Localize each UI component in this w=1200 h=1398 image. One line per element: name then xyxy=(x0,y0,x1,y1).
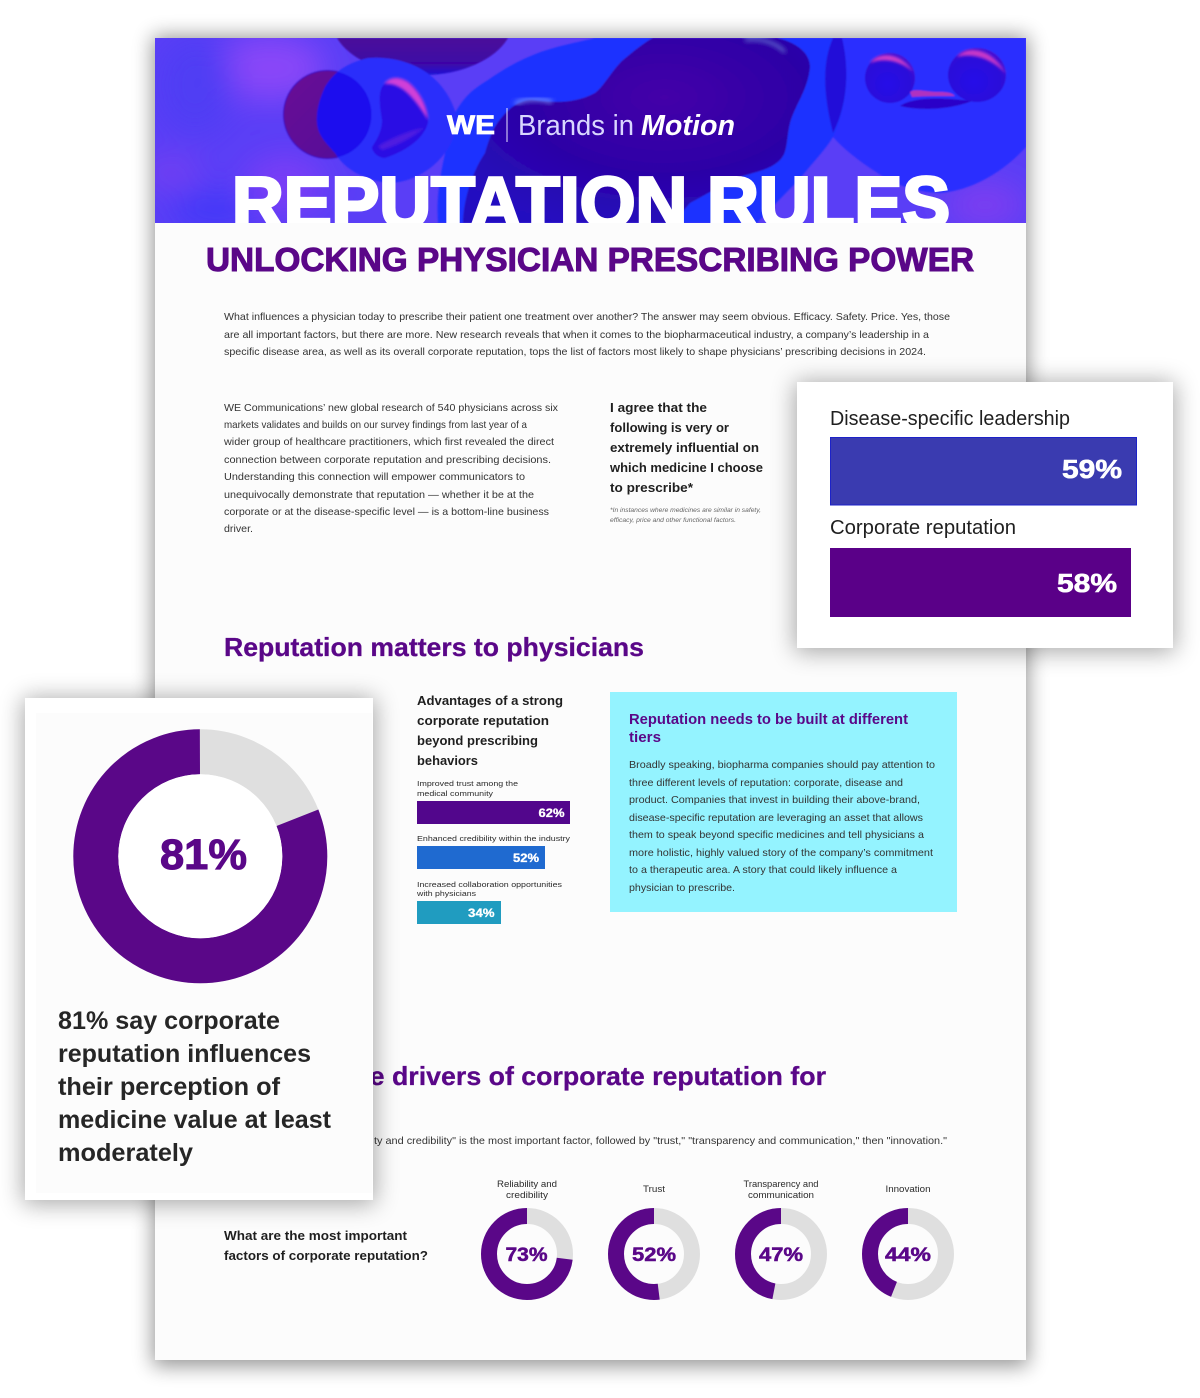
advantages heading: Advantages of a strong xyxy=(417,693,563,708)
footnote: *In instances where medicines are similar in safety, xyxy=(610,507,761,514)
bar chart: advantages: 34% xyxy=(468,906,495,920)
card statement: their perception of xyxy=(58,1073,281,1101)
donut: reliability and credibility 73%: credibility xyxy=(506,1190,548,1200)
central bright blob xyxy=(438,38,846,223)
research paragraph: connection between corporate reputation and prescribing decisions. xyxy=(224,454,551,466)
research paragraph xyxy=(223,402,559,535)
right blue blob xyxy=(832,38,1026,194)
survey question xyxy=(609,400,763,495)
logo xyxy=(447,108,735,142)
bar chart: advantages: medical community xyxy=(417,789,493,798)
donut: trust 52% xyxy=(616,1184,692,1292)
factors question: What are the most important xyxy=(224,1228,408,1243)
panel: poster page xyxy=(155,38,1026,1360)
logo: WE xyxy=(447,110,495,140)
research paragraph: WE Communications’ new global research of 540 physicians across six xyxy=(224,402,559,414)
callout: reputation tiers: product. Companies that invest in building their above-brand, xyxy=(629,794,920,806)
card statement: moderately xyxy=(58,1139,193,1167)
research paragraph: Understanding this connection will empower communicators to xyxy=(224,471,525,483)
logo: Brands in xyxy=(518,110,634,142)
shadow: poster page xyxy=(153,36,1028,1366)
research paragraph: markets validates and builds on our survey findings from last year of a xyxy=(224,419,527,431)
survey question: to prescribe* xyxy=(610,480,694,495)
donut: transparency and communication 47% xyxy=(743,1179,819,1292)
donut: transparency and communication 47%: Transparency and xyxy=(744,1179,818,1189)
card statement: medicine value at least xyxy=(58,1106,332,1134)
section heading: drivers: What are the drivers of corporate reputation for xyxy=(224,1061,826,1091)
section heading: reputation matters: Reputation matters to physicians xyxy=(224,632,644,662)
subtitle: UNLOCKING PHYSICIAN PRESCRIBING POWER xyxy=(206,241,974,278)
panel: leadership card: Disease-specific leadership xyxy=(830,408,1070,430)
card statement: 81% say corporate xyxy=(58,1007,280,1035)
card statement: reputation influences xyxy=(58,1040,311,1068)
callout: reputation tiers xyxy=(610,692,957,912)
callout: reputation tiers: more holistic, highly valued story of the company’s commitment xyxy=(629,847,933,859)
donut: reliability and credibility 73%: 73% xyxy=(506,1245,548,1266)
panel: leadership card xyxy=(797,382,1173,648)
blue bubble xyxy=(338,56,457,183)
donut: innovation 44% xyxy=(870,1184,946,1292)
factors question xyxy=(224,1228,428,1263)
bar chart: advantages: Increased collaboration opportunities xyxy=(417,880,562,889)
shadow: leadership card xyxy=(795,382,1175,652)
title: REPUTATION RULES xyxy=(232,164,950,244)
donut: transparency and communication 47%: 47% xyxy=(759,1245,803,1266)
survey question: which medicine I choose xyxy=(609,460,763,475)
dark circle xyxy=(282,69,338,160)
intro paragraph xyxy=(224,311,950,358)
callout: reputation tiers: three different levels of reputation: corporate, disease and xyxy=(629,777,903,789)
intro paragraph: What influences a physician today to prescribe their patient one treatment over another? The answer may seem obvious. Efficacy. Safety. Price. Yes, those xyxy=(224,311,950,323)
donut: trust 52%: 52% xyxy=(632,1245,676,1266)
highlights xyxy=(745,40,785,52)
callout: reputation tiers: to a therapeutic area. A story that could likely influence a xyxy=(629,864,897,876)
intro paragraph: specific disease area, as well as its overall corporate reputation, tops the list of factors most likely to shape physicians’ prescribing decisions in 2024. xyxy=(224,346,926,358)
card statement xyxy=(58,1007,332,1167)
shadow: 81% card xyxy=(23,698,375,1204)
donut: transparency and communication 47%: communication xyxy=(748,1190,814,1200)
bar chart: advantages xyxy=(416,779,570,924)
panel: leadership card: 58% xyxy=(1057,568,1117,598)
header banner xyxy=(155,38,1026,223)
drivers text: Physicians say "reliabili xyxy=(224,1135,374,1147)
research paragraph: wider group of healthcare practitioners, which first revealed the direct xyxy=(223,436,554,448)
donut: reliability and credibility 73%: Reliability and xyxy=(497,1179,557,1189)
lens shadow and connector xyxy=(900,99,972,109)
research paragraph: driver. xyxy=(224,523,253,535)
bar chart: advantages: 62% xyxy=(538,806,565,820)
survey question: I agree that the xyxy=(610,400,707,415)
donut: innovation 44%: Innovation xyxy=(886,1184,930,1194)
callout: reputation tiers: tiers xyxy=(629,730,661,746)
bar chart: advantages: with physicians xyxy=(416,889,476,898)
advantages heading: corporate reputation xyxy=(417,713,549,728)
callout: reputation tiers: Broadly speaking, biopharma companies should pay attention to xyxy=(629,759,935,771)
lens strip xyxy=(825,38,846,133)
footnote: efficacy, price and other functional factors. xyxy=(610,517,736,524)
callout: reputation tiers: disease-specific reputation are leveraging an asset that allows xyxy=(629,812,923,824)
research paragraph: unequivocally demonstrate that reputation — whether it be at the xyxy=(224,489,534,501)
core dark blob xyxy=(463,38,810,223)
research paragraph: corporate or at the disease-specific level — is a bottom-line business xyxy=(224,506,549,518)
donut: reliability and credibility 73% xyxy=(489,1179,565,1292)
bar chart: advantages: Improved trust among the xyxy=(417,779,518,788)
factors question: factors of corporate reputation? xyxy=(224,1248,428,1263)
panel: leadership card: 59% xyxy=(1062,454,1122,484)
right lens right xyxy=(948,48,1006,102)
survey question: following is very or xyxy=(610,420,729,435)
donut: 81 percent xyxy=(96,752,305,961)
right lens left xyxy=(865,53,915,103)
drivers text: ty and credibility" is the most important factor, followed by "trust," "transparency and communication," then "innovation." xyxy=(374,1135,947,1147)
donut: 81 percent: 81% xyxy=(160,831,247,879)
advantages heading: beyond prescribing xyxy=(417,733,538,748)
callout: reputation tiers: Reputation needs to be built at different xyxy=(629,712,908,728)
bar chart: advantages: 52% xyxy=(513,851,539,865)
advantages heading: behaviors xyxy=(417,753,478,768)
logo: Motion xyxy=(641,110,735,142)
bubble lens xyxy=(372,79,428,158)
panel: leadership card: Corporate reputation xyxy=(830,517,1016,539)
callout: reputation tiers: them to speak beyond specific medicines and tell physicians a xyxy=(629,829,924,841)
donut: trust 52%: Trust xyxy=(643,1184,665,1194)
footnote xyxy=(610,507,761,524)
panel: 81% card xyxy=(25,698,373,1200)
callout: reputation tiers: physician to prescribe. xyxy=(629,882,735,894)
survey question: extremely influential on xyxy=(610,440,759,455)
intro paragraph: are all important factors, but there are more. New research reveals that when it comes to the biopharmaceutical industry, a company’s leadership in a xyxy=(224,329,929,341)
bar chart: advantages: Enhanced credibility within the industry xyxy=(417,834,570,843)
top dark blob xyxy=(337,38,508,75)
advantages heading xyxy=(417,693,563,768)
donut: innovation 44%: 44% xyxy=(885,1245,931,1266)
